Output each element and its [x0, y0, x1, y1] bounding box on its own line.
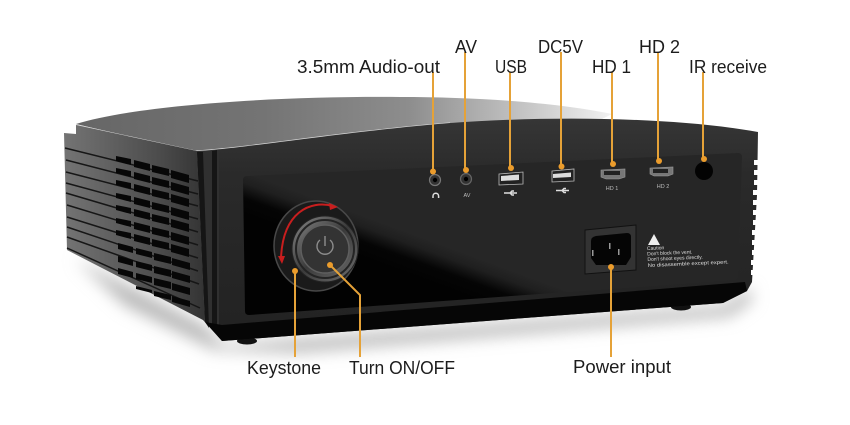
label: AV: AV: [455, 37, 477, 57]
port label: HD 1: HD 1: [606, 186, 618, 192]
ports row: [430, 162, 713, 199]
icon: warning triangle: [648, 234, 660, 245]
label: IR receive: IR receive: [689, 57, 767, 77]
right edge notches: [751, 160, 759, 275]
label: DC5V: DC5V: [538, 37, 583, 57]
port label: HD 2: HD 2: [657, 184, 669, 190]
callout labels: [247, 37, 767, 378]
HDMI port 1: [601, 169, 625, 179]
IR receiver: [695, 162, 713, 180]
leader lines: [292, 52, 707, 357]
icon: rotation arrow: [278, 203, 338, 264]
caution note: No disassemble except expert.: [648, 259, 729, 269]
label: HD 2: HD 2: [639, 37, 680, 57]
caution note: Don't shoot eyes directly.: [647, 255, 703, 263]
front corner band: [197, 150, 219, 334]
side with fins: [64, 125, 222, 341]
label: Keystone: Keystone: [247, 358, 321, 378]
caution note: Don't block the vent.: [647, 250, 692, 257]
glossy front panel: [243, 153, 742, 315]
icon: USB 2: [556, 188, 569, 192]
keystone knob: [274, 201, 358, 291]
label: 3.5mm Audio-out: 3.5mm Audio-out: [297, 57, 440, 77]
label: Power input: Power input: [573, 357, 671, 377]
side vents: [116, 156, 190, 307]
label: HD 1: HD 1: [592, 57, 631, 77]
label: USB: USB: [495, 57, 527, 77]
icon: headphones: [433, 193, 439, 198]
AV jack: [460, 174, 472, 184]
caution note: Caution: [647, 245, 665, 252]
audio jack: [430, 174, 440, 186]
bottom lip: [205, 282, 747, 341]
rear feet: [237, 338, 257, 344]
USB port 2: [552, 169, 574, 182]
port label: AV: AV: [464, 193, 471, 199]
icon: USB 1: [504, 191, 517, 195]
top surface: [76, 97, 612, 152]
projector body: [64, 97, 759, 344]
icon: power symbol: [317, 236, 333, 254]
caution note: [647, 234, 729, 269]
HDMI port 2: [650, 167, 673, 176]
label: Turn ON/OFF: Turn ON/OFF: [349, 358, 455, 378]
USB port 1: [499, 172, 523, 185]
floor shadow: [75, 258, 752, 352]
power socket: [585, 225, 636, 274]
front shell: [197, 119, 758, 341]
